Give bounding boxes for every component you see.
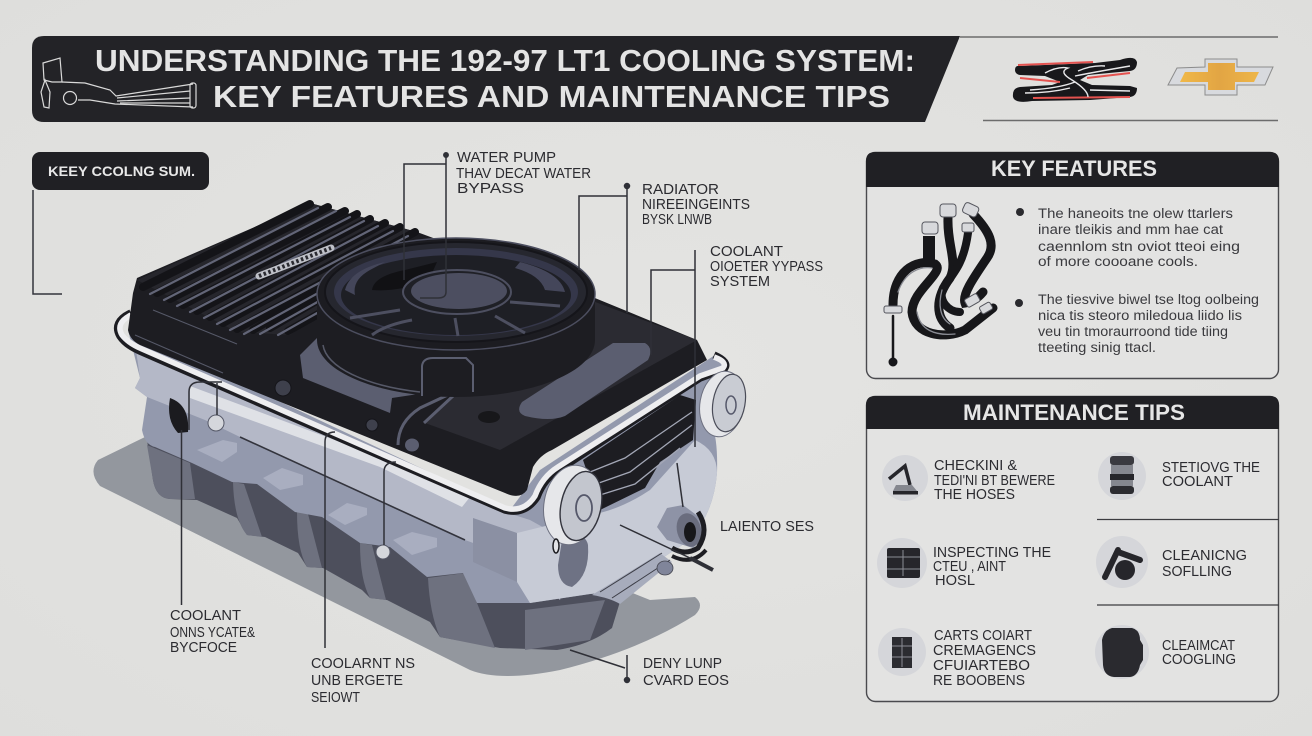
icon: cooling case <box>1095 625 1149 679</box>
icon: coolant unit <box>878 628 926 676</box>
label: coolant bottom left: BYCFOCE <box>170 640 237 656</box>
icon: coolant stack <box>1098 452 1146 500</box>
feature text 1: caennlom stn oviot tteoi eing <box>1038 239 1240 254</box>
callout: key cooling system tag <box>32 152 209 294</box>
right cooler fins <box>583 395 696 510</box>
fin block <box>137 203 417 335</box>
feature text 1: of more coooane cools. <box>1038 254 1198 269</box>
right side light housing <box>517 440 717 603</box>
black top housing <box>128 203 707 496</box>
tip text: inspecting: CTEU , AINT <box>933 559 1006 575</box>
label: coolant bypass system: SYSTEM <box>710 274 770 290</box>
label: coolant bottom centre <box>311 656 415 706</box>
heading: key features: KEY FEATURES <box>991 156 1157 181</box>
fan dark opening <box>372 262 437 290</box>
logo: black and red S emblem <box>1013 58 1137 102</box>
small fittings <box>208 415 559 559</box>
label: coolant bypass system: COOLANT <box>710 244 783 260</box>
feature text 2: The tiesvive biwel tse ltog oolbeing <box>1038 292 1259 307</box>
strap screw <box>405 438 419 452</box>
tip text: checking: CHECKINI & <box>934 458 1017 474</box>
tip text: cooling <box>1162 638 1236 668</box>
lid strap <box>398 393 453 445</box>
housing side lines <box>135 310 237 373</box>
icon: hose check <box>882 455 928 501</box>
label: water pump: THAV DECAT WATER <box>456 166 591 182</box>
label: water pump: BYPASS <box>457 181 524 197</box>
slate base plate <box>300 335 425 413</box>
tip text: checking <box>934 458 1055 503</box>
left bracket <box>169 398 188 433</box>
feature text 1 <box>1038 206 1240 269</box>
logo: gold bowtie <box>1168 59 1273 95</box>
tip text: inspecting <box>933 545 1051 589</box>
fan front stub <box>422 358 473 396</box>
label: coolant bottom centre: UNB ERGETE <box>311 673 403 689</box>
fin nameplate <box>259 248 331 276</box>
tip text: carts coolant: CARTS COIART <box>934 628 1032 644</box>
feature text 2 <box>1038 292 1259 355</box>
callout: key cooling system tag: KEEY CCOLNG SUM. <box>48 163 195 179</box>
white rim <box>118 313 726 511</box>
label: pump cover <box>643 656 729 689</box>
label: radiator <box>642 182 750 228</box>
label: coolant bottom centre: COOLARNT NS <box>311 656 415 672</box>
title text: UNDERSTANDING THE 192-97 LT1 COOLING SYSTEM: <box>95 43 915 78</box>
label: coolant bypass system: OIOETER YYPASS <box>710 259 823 275</box>
fan cylinder <box>317 294 595 397</box>
title text <box>95 43 915 114</box>
engine cooling system illustration <box>93 203 750 676</box>
label: right outlet: LAIENTO SES <box>720 519 814 535</box>
lid cap <box>478 411 500 423</box>
icon: cooling hose outline <box>41 58 196 108</box>
label: pump cover: CVARD EOS <box>643 673 729 689</box>
mount screws <box>275 380 378 431</box>
tip text: cooling: CLEAIMCAT <box>1162 638 1235 654</box>
label: radiator: NIREEINGEINTS <box>642 197 750 213</box>
lid slate panel <box>519 343 650 419</box>
right lid <box>425 300 697 450</box>
tip text: coolant: COOLANT <box>1162 474 1233 490</box>
feature text 1: The haneoits tne olew ttarlers <box>1038 206 1233 221</box>
fan outer rim <box>317 238 595 350</box>
tip text: coolant <box>1162 460 1260 490</box>
tip text: inspecting: INSPECTING THE <box>933 545 1051 561</box>
tip text: carts coolant: CREMAGENCS <box>933 643 1036 659</box>
feature text 2: veu tin tmoraurroond tide tiing <box>1038 324 1228 339</box>
label: water pump: WATER PUMP <box>457 150 556 166</box>
fan vanes <box>345 262 565 295</box>
tip text: cleaning <box>1162 548 1247 580</box>
label: coolant bottom left: ONNS YCATE& <box>170 625 255 641</box>
bullet 2 <box>1015 299 1023 307</box>
tip text: carts coolant: RE BOOBENS <box>933 673 1025 689</box>
tip text: cleaning: SOFLLING <box>1162 564 1232 580</box>
tip text: cleaning: CLEANICNG <box>1162 548 1247 564</box>
tub ribs <box>147 445 605 650</box>
feature text 1: inare tleikis and mm hae cat <box>1038 222 1223 237</box>
cooling fins <box>143 204 415 335</box>
heading: maintenance tips: MAINTENANCE TIPS <box>963 400 1185 425</box>
outlet port <box>657 505 706 560</box>
bullet 1 <box>1016 208 1024 216</box>
panel: maintenance tips <box>866 396 1279 702</box>
feature text 2: nica tis steoro miledoua liido lis <box>1038 308 1242 323</box>
ground shadow <box>93 437 700 676</box>
feature text 2: tteeting sinig ttacl. <box>1038 340 1156 355</box>
side recess panel <box>473 518 517 582</box>
tip text: inspecting: HOSL <box>935 573 975 589</box>
tip text: cooling: COOGLING <box>1162 652 1236 668</box>
icon: cleaning tools <box>1096 536 1148 588</box>
tip text: carts coolant: CFUIARTEBO <box>933 658 1030 674</box>
label: coolant bypass system <box>710 244 823 290</box>
label: radiator: RADIATOR <box>642 182 719 198</box>
label: radiator: BYSK LNWB <box>642 212 712 228</box>
side blocks <box>197 440 437 555</box>
label: coolant bottom left <box>170 608 255 656</box>
label: coolant bottom left: COOLANT <box>170 608 241 624</box>
strut <box>592 553 673 604</box>
leader lines <box>182 153 713 683</box>
icon: inspecting block <box>877 538 927 588</box>
tip text: checking: TEDI'NI BT BEWERE <box>934 473 1055 489</box>
label: water pump <box>456 150 591 197</box>
left disc cap <box>537 461 608 549</box>
right disc cap <box>695 368 750 440</box>
title text: KEY FEATURES AND MAINTENANCE TIPS <box>213 79 890 114</box>
lower tub <box>147 440 622 650</box>
panel: key features <box>866 152 1279 378</box>
title banner <box>32 36 960 122</box>
fan spokes <box>350 302 560 336</box>
upper light band <box>135 350 575 600</box>
fan hub <box>403 270 511 314</box>
tip text: carts coolant <box>933 628 1036 689</box>
tip text: checking: THE HOSES <box>934 487 1015 503</box>
header rules <box>960 37 1278 120</box>
label: coolant bottom centre: SEIOWT <box>311 690 360 706</box>
silver body <box>128 330 740 603</box>
label: pump cover: DENY LUNP <box>643 656 722 672</box>
tip text: coolant: STETIOVG THE <box>1162 460 1260 476</box>
icon: coolant hoses <box>884 202 993 366</box>
